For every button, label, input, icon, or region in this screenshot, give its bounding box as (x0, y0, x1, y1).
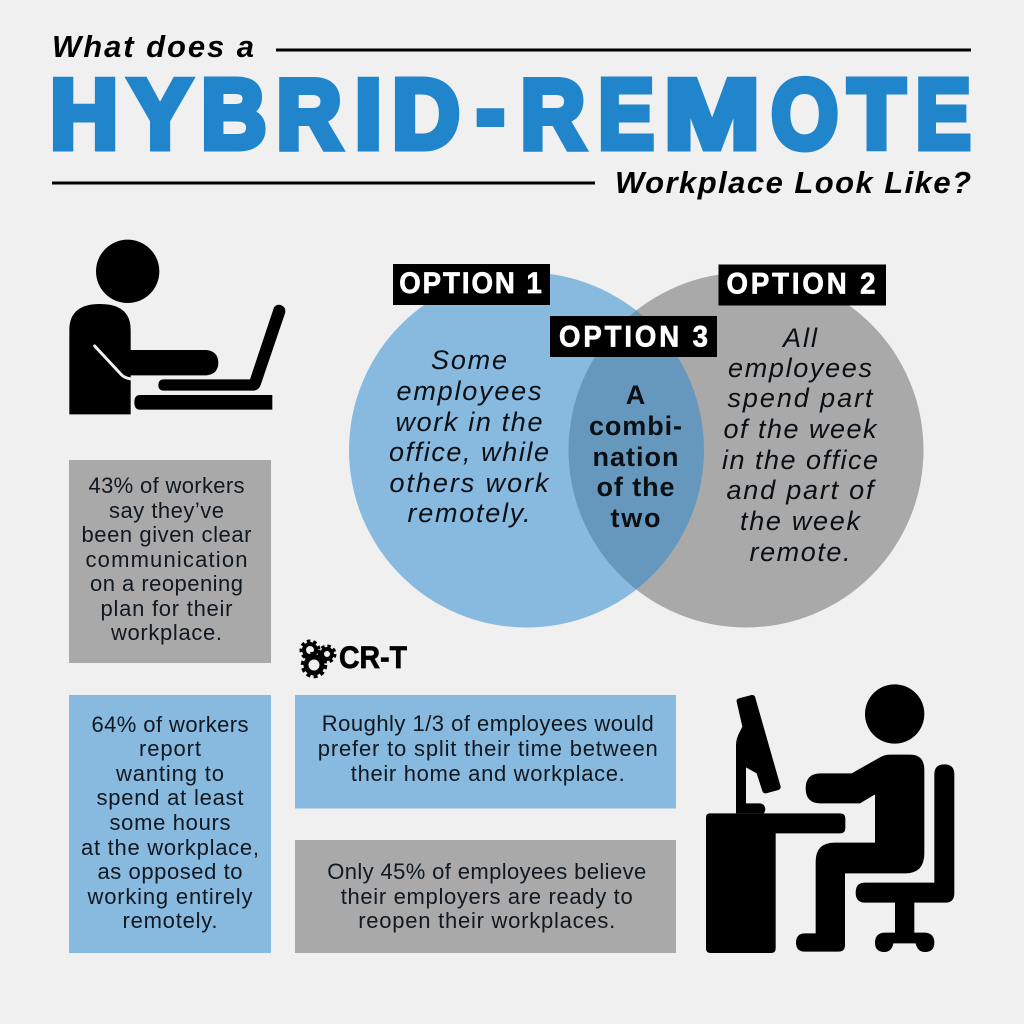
panel: 45% stat: reopen their workplaces. (358, 908, 615, 933)
text: option 3 description: nation (592, 442, 678, 472)
title main heading: E (598, 59, 654, 169)
title main heading: D (392, 60, 460, 169)
panel: 64% stat: 64% of workers (92, 712, 248, 737)
title main heading: I (355, 59, 382, 169)
panel: 64% stat: working entirely (86, 884, 252, 909)
title main heading: - (476, 55, 505, 165)
title main heading: O (771, 58, 838, 169)
icon: gears (301, 641, 335, 676)
title main heading: T (848, 59, 905, 169)
panel: 45% stat (295, 840, 676, 953)
panel: 45% stat: their employers are ready to (341, 884, 633, 909)
text: option 2 description: spend part (728, 383, 874, 413)
panel: 43% stat: been given clear (82, 522, 252, 547)
tag: option 1: OPTION 1 (399, 267, 542, 300)
panel: split time stat (295, 695, 676, 808)
panel: split time stat: prefer to split their time between (318, 736, 658, 761)
panel: split time stat: Roughly 1/3 of employees would (322, 711, 654, 736)
title main heading: B (201, 59, 266, 170)
text: option 2 description: employees (728, 353, 872, 383)
title main heading (50, 55, 971, 170)
overlap: option 3 (568, 310, 704, 590)
logo: CR-T: CR-T (339, 639, 407, 675)
panel: split time stat: their home and workplace. (351, 761, 625, 786)
panel: 45% stat: Only 45% of employees believe (327, 859, 646, 884)
title main heading: H (50, 60, 118, 169)
text: option 1 description (389, 345, 550, 528)
text: option 1 description: remotely. (408, 498, 530, 528)
logo: CR-T (301, 639, 407, 676)
text: option 2 description: the week (740, 506, 862, 536)
panel: 43% stat: say they’ve (109, 498, 224, 523)
circle: option 1 (349, 272, 704, 628)
panel: 64% stat: remotely. (122, 908, 218, 933)
text: option 1 description: Some (431, 345, 507, 375)
panel: 43% stat: workplace. (110, 620, 222, 645)
title main heading: R (276, 59, 342, 170)
text: option 3 description (589, 380, 682, 533)
panel: 43% stat: 43% of workers (88, 473, 244, 498)
panel: 43% stat: plan for their (100, 596, 232, 621)
text: option 2 description: in the office (722, 445, 878, 475)
title main heading: Y (129, 60, 191, 169)
title line two: Workplace Look Like? (615, 165, 971, 200)
panel: 64% stat: at the workplace, (81, 835, 259, 860)
text: option 3 description: two (610, 503, 660, 533)
panel: 64% stat: wanting to (115, 761, 224, 786)
panel: 64% stat (69, 695, 271, 953)
title main heading: E (916, 60, 971, 169)
icon: person at desktop (706, 684, 954, 953)
text: option 3 description: of the (596, 472, 674, 502)
panel: 43% stat: communication (86, 547, 248, 572)
text: option 2 description: of the week (724, 414, 878, 444)
text: option 2 description: and part of (726, 475, 876, 505)
panel: 64% stat: some hours (110, 810, 230, 835)
text: option 1 description: employees (396, 376, 542, 406)
panel: 64% stat: spend at least (96, 785, 244, 810)
text: option 3 description: A (626, 380, 645, 410)
tag: option 2: OPTION 2 (726, 267, 876, 301)
panel: 43% stat (69, 460, 271, 663)
title (50, 29, 971, 200)
text: option 1 description: office, while (389, 437, 549, 467)
text: option 2 description: All (781, 323, 818, 353)
title main heading: M (664, 59, 760, 169)
panel: 64% stat: as opposed to (98, 859, 242, 884)
text: option 1 description: work in the (396, 407, 542, 437)
venn diagram (349, 264, 924, 628)
title line one: What does a (52, 29, 254, 64)
icon: person at laptop (69, 240, 285, 414)
panel: 43% stat: on a reopening (90, 571, 243, 596)
text: option 2 description: remote. (750, 537, 850, 567)
tag: option 3: OPTION 3 (559, 320, 708, 354)
text: option 2 description (722, 323, 878, 567)
circle: option 2 (568, 272, 924, 628)
panel: 64% stat: report (139, 736, 201, 761)
text: option 3 description: combi- (589, 411, 682, 441)
text: option 1 description: others work (390, 468, 550, 498)
title main heading: R (520, 59, 585, 169)
